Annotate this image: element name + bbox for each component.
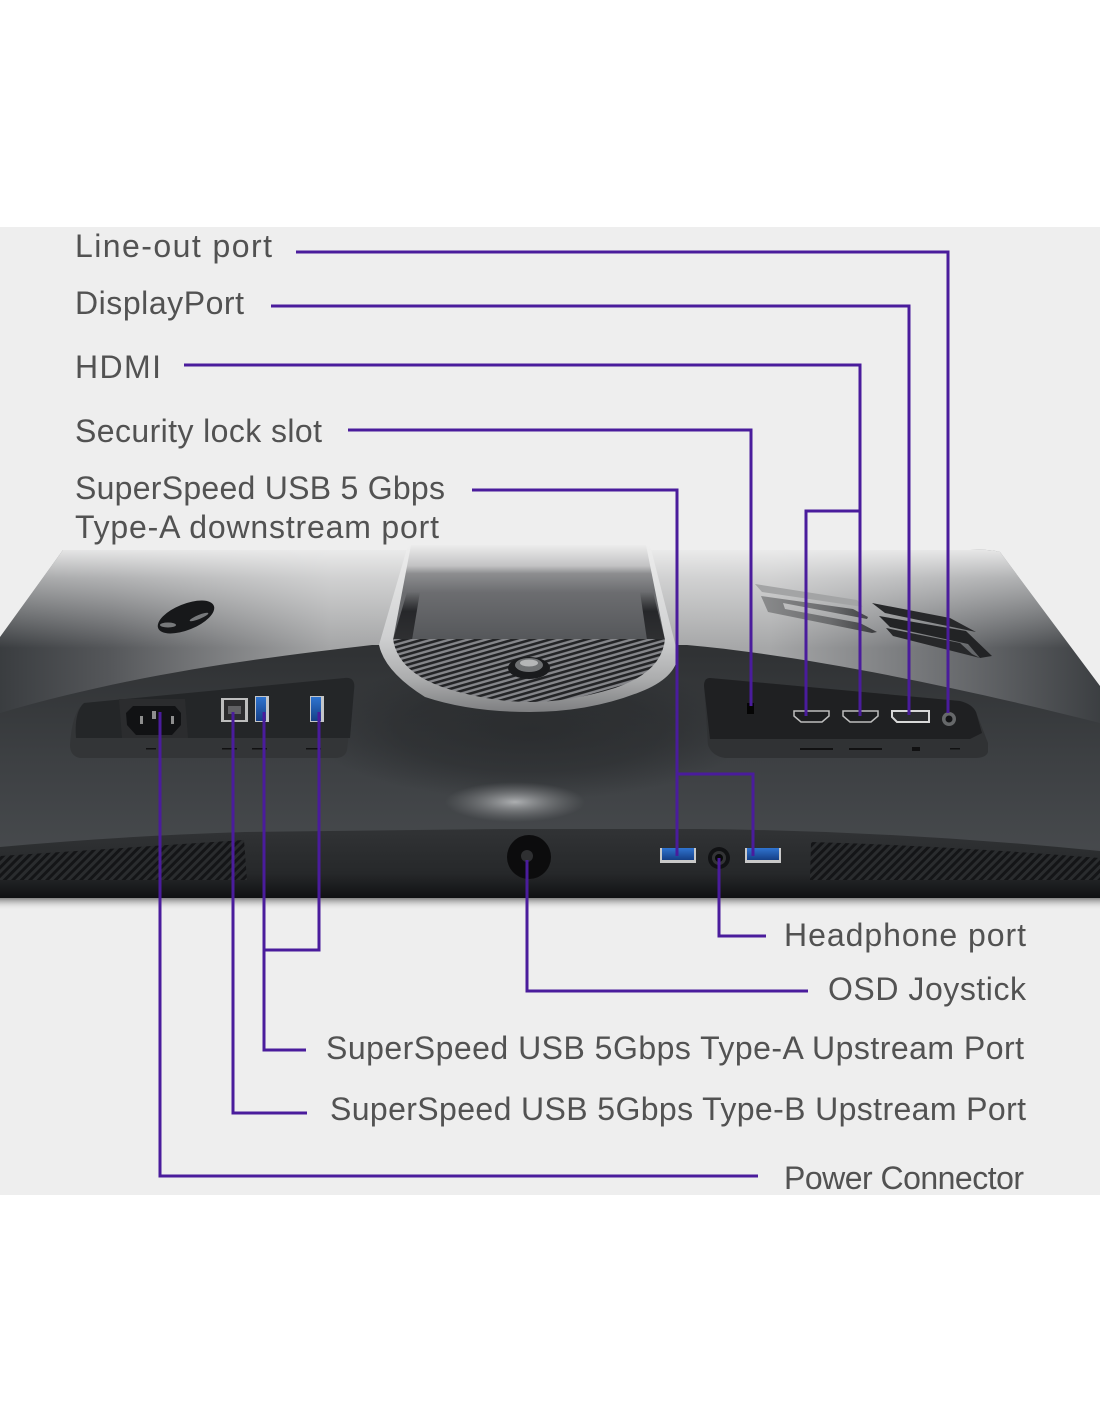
callout: Type-B upstream port (233, 712, 1026, 1127)
headphone jack (708, 847, 730, 869)
security lock slot (747, 703, 754, 714)
callout: HDMI (75, 349, 860, 716)
DisplayPort port (892, 711, 929, 722)
stand release button (508, 657, 550, 679)
infographic (0, 227, 1100, 1195)
USB Type-B port (221, 698, 248, 722)
USB Type-A port right (310, 696, 324, 722)
right vent (810, 842, 1100, 880)
brand logo (153, 594, 219, 640)
monitor back cover (0, 550, 1100, 723)
callout: line-out port (75, 228, 948, 713)
right port recess (704, 678, 988, 758)
USB Type-A port left (255, 696, 269, 722)
callout: SuperSpeed USB downstream: SuperSpeed USB 5 Gbps (75, 470, 445, 506)
HDMI 2 port (843, 711, 878, 722)
callout: Type-B upstream port: SuperSpeed USB 5Gbps Type-B Upstream Port (330, 1091, 1026, 1127)
left vent (0, 840, 247, 880)
OSD joystick (507, 835, 551, 879)
front bezel band (0, 829, 1100, 898)
callout: security lock slot: Security lock slot (75, 413, 322, 449)
callout: power connector (160, 712, 1024, 1196)
grey background panel (0, 227, 1100, 1195)
model number emblem (755, 584, 992, 658)
shadow under stand (310, 660, 750, 800)
callout: OSD joystick: OSD Joystick (828, 971, 1027, 1007)
monitor rear view (0, 545, 1100, 898)
highlight on shell (445, 782, 585, 822)
stand neck (379, 545, 678, 712)
callout: SuperSpeed USB downstream (75, 470, 753, 856)
left port recess (70, 678, 354, 758)
callout: DisplayPort (75, 285, 909, 715)
callout: headphone port: Headphone port (784, 917, 1026, 953)
HDMI 1 port (794, 711, 829, 722)
monitor ground shadow (0, 898, 1100, 910)
callout: OSD joystick (527, 860, 1027, 1007)
callout: power connector: Power Connector (784, 1160, 1024, 1196)
callout: DisplayPort: DisplayPort (75, 285, 244, 321)
port labels on recess (146, 747, 960, 751)
callout: security lock slot (75, 413, 751, 706)
callout: Type-A upstream port: SuperSpeed USB 5Gbps Type-A Upstream Port (326, 1030, 1024, 1066)
front USB port right (745, 848, 781, 863)
stand hatched mount (393, 639, 665, 702)
callout: headphone port (719, 858, 1026, 953)
callout: SuperSpeed USB downstream: Type-A downstream port (75, 509, 439, 545)
callout: HDMI: HDMI (75, 349, 161, 385)
callout: Type-A upstream port (264, 712, 1024, 1066)
power connector (119, 699, 188, 738)
lower dark shell (0, 645, 1100, 898)
callout: line-out port: Line-out port (75, 228, 272, 264)
line-out jack (942, 712, 956, 726)
front USB port left (660, 848, 696, 863)
